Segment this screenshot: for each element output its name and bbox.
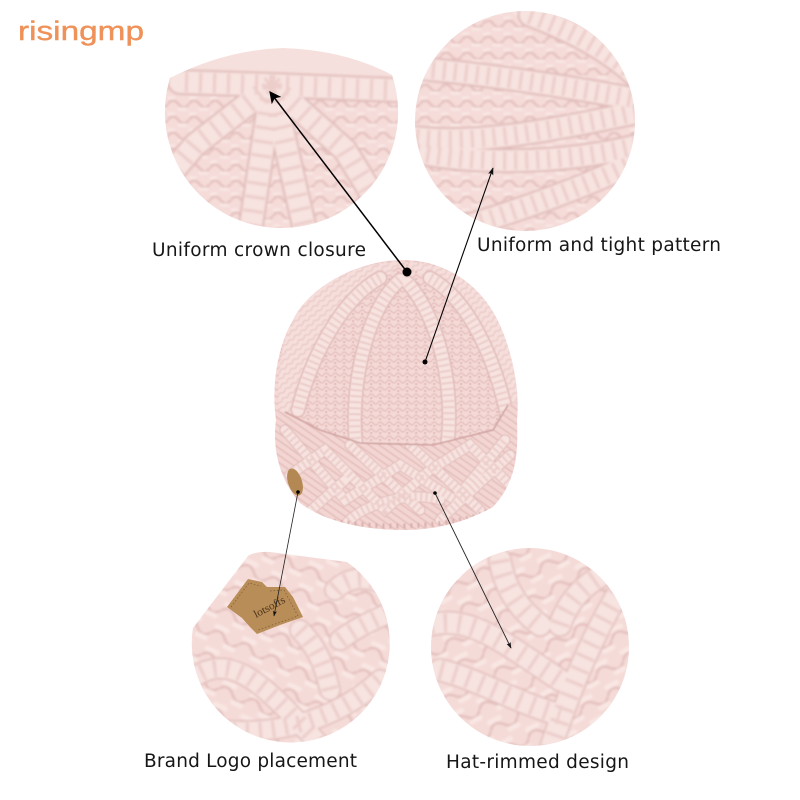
icon: leather patch <box>284 467 306 497</box>
panel: tight pattern detail <box>415 11 635 231</box>
arrow: crown <box>270 92 412 276</box>
label: brand logo: Brand Logo placement <box>144 751 357 772</box>
arrow: rim <box>433 491 511 648</box>
panel: hat-rim detail <box>431 548 629 746</box>
label: hat rim: Hat-rimmed design <box>446 752 629 773</box>
label: crown closure: Uniform crown closure <box>152 240 366 261</box>
icon: brand tag <box>227 579 303 634</box>
icon: brand tag: lotsoffs <box>252 594 287 621</box>
hat illustration <box>265 255 525 535</box>
label: tight pattern: Uniform and tight pattern <box>477 235 721 256</box>
arrow: logo <box>274 490 300 616</box>
panel: crown closure detail <box>165 48 398 228</box>
arrow: pattern <box>422 168 493 364</box>
panel: brand logo detail <box>192 552 390 742</box>
brand wordmark: risingmp <box>18 16 144 46</box>
